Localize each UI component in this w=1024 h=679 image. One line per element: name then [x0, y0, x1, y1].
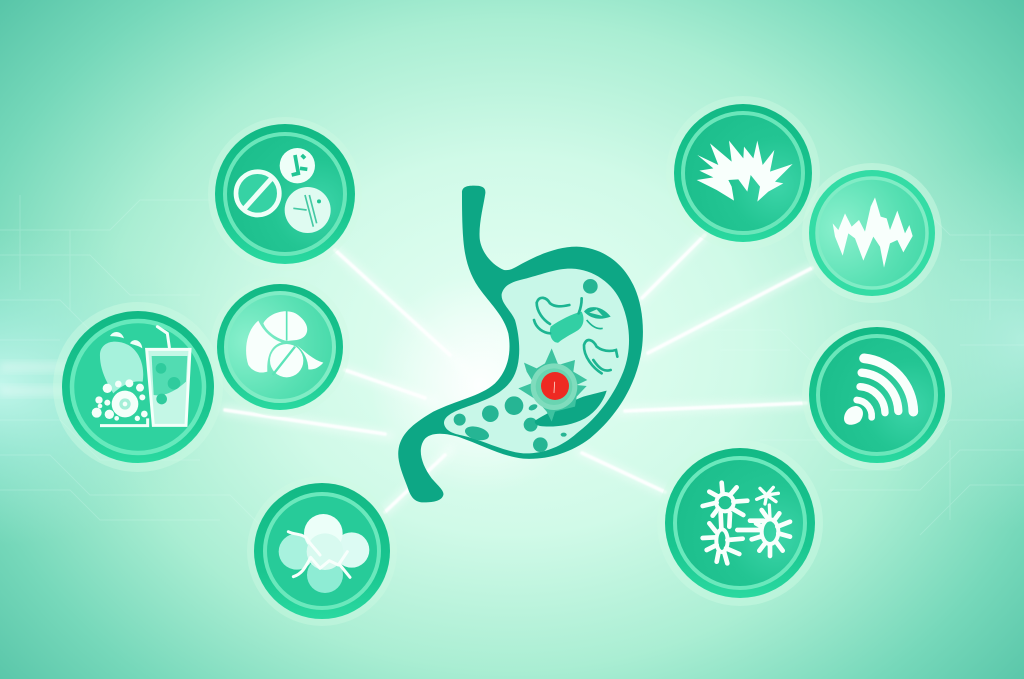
icon: spiky burst — [697, 141, 793, 202]
icon: jagged wave — [833, 197, 913, 268]
icon circle: tablets — [210, 277, 350, 417]
icon circle: burst pain — [666, 96, 820, 250]
stomach illustration — [398, 186, 643, 502]
light rays from stomach to icons — [225, 235, 812, 512]
icon circle: waveform — [802, 163, 942, 303]
icon circle: bacteria — [657, 440, 823, 606]
icon: pills — [236, 148, 331, 233]
stomach lumen — [444, 269, 629, 453]
icon: bacteria cells — [703, 483, 790, 563]
icon circle: food and drink — [53, 302, 223, 472]
stomach wall — [398, 186, 643, 502]
icon: signal arcs — [844, 358, 913, 425]
icon: junk food and soda — [92, 327, 190, 426]
icon circle: signal — [802, 320, 952, 470]
virus spikes — [518, 348, 587, 422]
icon circle: stress cloud — [247, 476, 397, 626]
icon: split tablets — [246, 310, 323, 377]
icon circle: medication — [208, 117, 362, 271]
food and bacteria inside stomach — [454, 279, 617, 452]
icon: cloud with crack — [279, 514, 369, 593]
red lesion — [541, 372, 569, 400]
